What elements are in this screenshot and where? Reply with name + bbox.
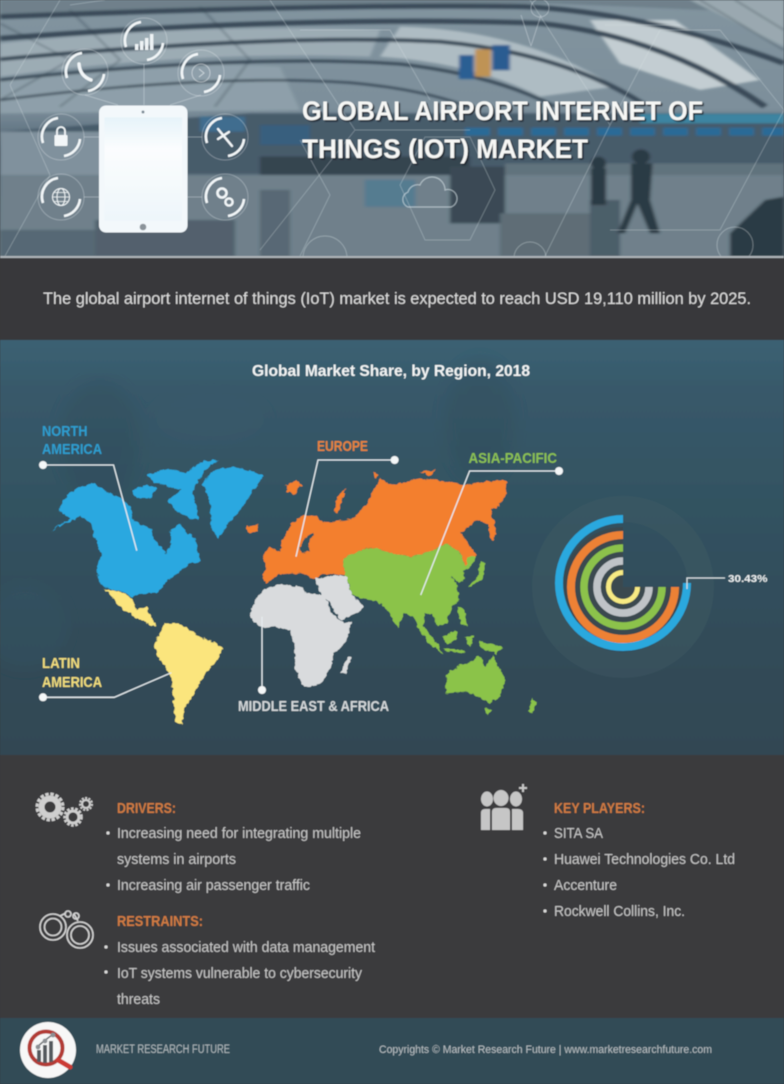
title: GLOBAL AIRPORT INTERNET OF	[302, 96, 703, 126]
list: drivers: Increasing air passenger traffic	[117, 877, 310, 894]
label: Latin America	[42, 655, 102, 691]
heading: market share: Global Market Share, by Region, 2018	[252, 363, 530, 380]
map: Latin America	[104, 588, 223, 725]
leader line: North America	[39, 461, 137, 551]
label: Europe: EUROPE	[317, 438, 368, 455]
list: drivers: Increasing need for integrating multiple	[117, 825, 361, 842]
connector lines to tablet	[84, 64, 202, 197]
map: Europe and Russia	[246, 470, 507, 583]
icon: travellers silhouettes	[591, 149, 784, 257]
hexagon network overlay	[5, 0, 784, 256]
world map	[50, 460, 536, 725]
text: forecast statement: The global airport internet of things (IoT) market is expected to reach USD 19,110 million by 2025.	[43, 290, 751, 308]
leader line: Europe	[296, 456, 399, 557]
list: key players	[543, 825, 735, 920]
list: restraints: threats	[117, 991, 160, 1008]
map: Middle East and Africa	[250, 575, 364, 687]
list: drivers	[106, 825, 361, 894]
text: copyright: Copyrights © Market Research Future | www.marketresearchfuture.com	[379, 1044, 712, 1056]
icon: location pin	[521, 0, 549, 46]
icon: tablet	[99, 106, 188, 232]
list: restraints	[104, 939, 376, 1008]
list: key players: Huawei Technologies Co. Ltd	[554, 851, 735, 868]
label: Middle East and Africa: MIDDLE EAST & AFRICA	[238, 698, 389, 715]
leader line: Latin America	[39, 673, 171, 701]
label: share value: 30.43%	[728, 573, 768, 585]
list: key players: Accenture	[554, 877, 617, 894]
list: restraints: IoT systems vulnerable to cybersecurity	[117, 965, 362, 982]
heading: key players: KEY PLAYERS:	[554, 801, 645, 817]
label: North America	[42, 423, 102, 458]
label: North America: AMERICA	[42, 441, 102, 458]
title	[302, 96, 703, 164]
icon: people group	[481, 784, 527, 830]
label: Latin America: AMERICA	[42, 674, 102, 691]
icon: Market Research Future logo	[20, 1022, 76, 1078]
leader line: Middle East and Africa	[258, 617, 266, 694]
title: THINGS (IOT) MARKET	[302, 134, 588, 164]
label: North America: NORTH	[42, 423, 88, 440]
icon: handcuffs	[40, 911, 93, 948]
panel: footer	[0, 1018, 784, 1084]
panel: market forecast band	[0, 256, 784, 340]
list: key players: SITA SA	[554, 825, 603, 842]
icon: globe ring	[38, 174, 84, 220]
panel: drivers, restraints and key players	[0, 755, 784, 1018]
icon: play ring	[178, 50, 224, 96]
chart: radial share chart	[545, 509, 768, 665]
icon: phone ring	[62, 49, 108, 95]
list: key players: Rockwell Collins, Inc.	[554, 903, 685, 920]
icon: gears ring	[202, 174, 248, 220]
icon: cloud	[403, 177, 457, 207]
leader line: Asia-Pacific	[421, 467, 563, 595]
panel: header photo banner	[0, 0, 784, 280]
icon: bar chart ring	[121, 18, 167, 64]
label: Latin America: LATIN	[42, 655, 80, 672]
map: North America	[50, 460, 264, 597]
label: Asia-Pacific: ASIA-PACIFIC	[468, 450, 557, 467]
icon: gears	[37, 794, 92, 826]
icon: padlock ring	[38, 114, 84, 160]
icon: airplane ring	[202, 114, 248, 160]
list: drivers: systems in airports	[117, 851, 236, 868]
heading: drivers: DRIVERS:	[117, 801, 176, 817]
map: Asia-Pacific	[343, 543, 536, 715]
heading: restraints: RESTRAINTS:	[117, 914, 203, 930]
icon: faint globes at lower edge	[302, 226, 754, 256]
text: brand name: MARKET RESEARCH FUTURE	[96, 1044, 230, 1056]
panel: regional market share	[0, 340, 784, 755]
list: restraints: Issues associated with data management	[117, 939, 376, 956]
